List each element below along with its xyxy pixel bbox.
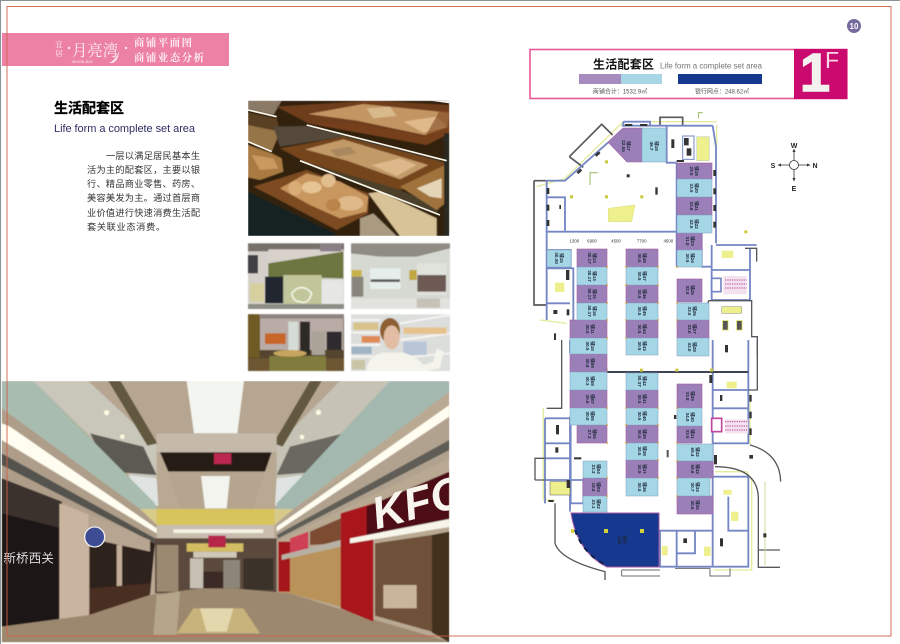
shop unit labels: 铺33	[694, 464, 701, 474]
blue shop units	[547, 128, 713, 512]
shop unit labels: 30.5	[637, 290, 642, 299]
dimension labels: 1300	[570, 239, 580, 244]
shop unit labels: 33.5	[689, 184, 694, 193]
shop unit labels: 30.5	[637, 483, 642, 492]
shop unit labels: 铺04	[595, 464, 602, 474]
page number: 10	[850, 22, 859, 31]
shop unit labels: 铺38	[641, 446, 648, 456]
shop unit labels: 铺44	[641, 324, 648, 334]
dimension labels: 6900	[587, 239, 597, 244]
left heading: 生活配套区	[54, 100, 124, 116]
shop unit labels: 铺36	[641, 482, 648, 492]
floor badge: F	[825, 47, 839, 73]
shop unit labels: 30.5	[637, 307, 642, 316]
shop unit labels: 30.0	[585, 412, 590, 421]
shop unit labels: 30.5	[685, 254, 690, 263]
dimension labels: 4500	[664, 239, 674, 244]
shop unit labels: 铺37	[641, 464, 648, 474]
shop unit labels: 铺11	[589, 324, 596, 334]
banner headings: 商铺业态分析	[134, 51, 204, 64]
body text: 行、精品商业零售、药房、	[87, 178, 200, 189]
shop unit labels: 28.5	[689, 167, 694, 176]
shop unit labels: 铺24	[689, 253, 696, 263]
shop unit labels: 68.4	[690, 448, 695, 457]
shop unit labels: 铺27	[691, 324, 698, 334]
shop unit labels: 33.0	[687, 325, 692, 334]
banner logo	[55, 39, 127, 64]
dimension labels: 4500	[611, 239, 621, 244]
shop unit labels: 248	[617, 536, 622, 544]
shop unit labels: 铺48	[641, 253, 648, 263]
shop unit labels: 30.17	[587, 305, 592, 317]
shop unit labels: 30.5	[637, 412, 642, 421]
legend bar: bank	[678, 74, 762, 84]
shop unit labels: 30.5	[690, 501, 695, 510]
shop unit labels	[554, 140, 701, 545]
shop unit labels: 30.5	[585, 342, 590, 351]
shop unit labels: 33.5	[687, 307, 692, 316]
shop unit labels: 铺45	[641, 306, 648, 316]
shop unit labels: 30.5	[637, 395, 642, 404]
floor plan	[534, 113, 781, 580]
shop unit labels: 铺17	[625, 141, 632, 151]
shop unit labels: 铺15	[591, 289, 598, 299]
legend captions	[593, 88, 749, 96]
shop unit labels: 铺25	[689, 285, 696, 295]
legend captions: 商铺合计：1532.9㎡	[593, 88, 647, 96]
bank unit	[571, 513, 659, 567]
shop unit labels: 22.55	[621, 140, 626, 152]
body text: 一层以满足居民基本生	[106, 150, 200, 161]
KFC lettering: KFC	[366, 465, 470, 539]
shop unit labels: 铺15	[558, 253, 565, 263]
shop unit labels: 铺41	[641, 394, 648, 404]
shop unit labels: 23.3	[591, 465, 596, 474]
shop unit labels: 银行	[621, 535, 628, 545]
shop unit labels: 铺14	[591, 271, 598, 281]
shop unit labels: 33.0	[689, 202, 694, 211]
shop unit labels: 34.0	[685, 413, 690, 422]
photo: dessert kiosk	[248, 243, 344, 309]
plan walls north	[534, 113, 757, 357]
purple shop units	[570, 128, 713, 514]
shop unit labels: 33.0	[687, 343, 692, 352]
shop unit labels: 30.8	[585, 359, 590, 368]
shop unit labels: 铺08	[589, 376, 596, 386]
floor badge	[794, 43, 847, 103]
shop unit labels: 铺06	[589, 411, 596, 421]
banner logo: MOON BAY	[72, 59, 94, 64]
shop unit labels: 30.5	[585, 325, 590, 334]
body text	[87, 150, 200, 232]
banner logo: 宜	[55, 39, 63, 49]
photo: mall corridor with KFC	[2, 381, 470, 642]
shop unit labels: 31.0	[685, 237, 690, 246]
legend title: 生活配套区	[593, 56, 654, 72]
shop unit labels: 铺43	[641, 341, 648, 351]
shop unit labels: 铺10	[589, 341, 596, 351]
shop unit labels: 30.3	[585, 377, 590, 386]
shop unit labels: 30.5	[637, 325, 642, 334]
shop unit labels: 30.5	[637, 447, 642, 456]
shop unit labels: 30.17	[587, 270, 592, 282]
shop unit labels: 58.8	[690, 465, 695, 474]
shop unit labels: 铺32	[694, 447, 701, 457]
shop unit labels: 27.3	[587, 430, 592, 439]
compass: N	[812, 163, 818, 170]
shop unit labels: 30.5	[637, 430, 642, 439]
legend subtitle: Life form a complete set area	[660, 62, 763, 70]
shop unit labels: 铺02	[595, 499, 602, 509]
shop unit labels: 30.7	[690, 483, 695, 492]
banner headings: 商铺平面图	[134, 36, 192, 49]
shop unit labels: 铺18	[653, 141, 660, 151]
compass: S	[771, 163, 776, 170]
shop unit labels: 18.6	[591, 483, 596, 492]
photo: pharmacist	[351, 314, 450, 371]
shop unit labels: 铺34	[694, 482, 701, 492]
storefront sign text: 新桥西关	[3, 550, 54, 565]
shop unit labels: 30.5	[637, 342, 642, 351]
banner	[2, 33, 229, 66]
body text: 活为主的配套区，主要以银	[87, 164, 200, 175]
shop unit labels: 32.5	[689, 220, 694, 229]
shop unit labels: 33.9	[685, 430, 690, 439]
left heading: Life form a complete set area	[54, 123, 196, 135]
shop unit labels: 铺05	[591, 429, 598, 439]
compass: W	[791, 143, 798, 150]
shop unit labels: 23.1	[591, 500, 596, 509]
shop unit labels: 46.7	[649, 142, 654, 151]
legend bar: shops	[579, 74, 662, 84]
banner logo: 月亮湾	[72, 42, 118, 60]
compass	[771, 143, 818, 193]
shop unit labels: 30.5	[637, 272, 642, 281]
shop unit labels: 铺09	[589, 358, 596, 368]
photo: fashion store	[248, 314, 344, 371]
banner logo: 居	[55, 49, 63, 58]
shop unit labels: 铺47	[641, 271, 648, 281]
legend panel	[530, 43, 847, 103]
legend captions: 银行网点：248.62㎡	[695, 88, 749, 96]
dimension labels	[570, 239, 674, 244]
shop unit labels: 铺03	[595, 482, 602, 492]
banner headings	[134, 36, 204, 64]
shop unit labels: 铺29	[689, 391, 696, 401]
shop unit labels: 30.37	[637, 375, 642, 387]
shop unit labels: 铺39	[641, 429, 648, 439]
shop unit labels: 30.17	[587, 252, 592, 264]
shop unit labels: 30.5	[637, 254, 642, 263]
shop unit labels: 铺20	[693, 183, 700, 193]
shop sign circle	[85, 527, 105, 547]
shop unit labels: 铺30	[689, 412, 696, 422]
left heading	[54, 100, 196, 135]
shop unit labels: 32.8	[685, 286, 690, 295]
shop unit labels: 铺19	[693, 166, 700, 176]
shop unit labels: 铺31	[689, 429, 696, 439]
shop unit labels: 30.6	[585, 395, 590, 404]
plan walls south	[535, 340, 781, 580]
shop unit labels: 铺13	[591, 253, 598, 263]
floor badge: 1	[800, 43, 830, 103]
shop unit labels: 铺16	[591, 306, 598, 316]
shop unit labels: 铺23	[689, 236, 696, 246]
page number	[847, 19, 861, 33]
photo: bakery baskets	[248, 101, 449, 236]
shop unit labels: 30.30	[554, 252, 559, 264]
shop unit labels: 30.17	[587, 288, 592, 300]
shop unit labels: 铺28	[691, 342, 698, 352]
shop unit labels: 铺26	[691, 306, 698, 316]
shop unit labels: 铺46	[641, 289, 648, 299]
body text: 业价值进行快速消费生活配	[87, 207, 200, 218]
body text: 套关联业态消费。	[87, 221, 165, 232]
shop unit labels: 30.5	[637, 465, 642, 474]
dimension labels: 7700	[637, 239, 647, 244]
photo collage	[248, 101, 450, 371]
shop unit labels: 铺42	[641, 376, 648, 386]
shop unit labels: 铺07	[589, 394, 596, 404]
column markers	[607, 267, 677, 496]
photo: shoe store	[351, 243, 450, 309]
shop unit labels: 铺40	[641, 411, 648, 421]
shop unit labels: 铺22	[693, 219, 700, 229]
shop unit labels: 铺21	[693, 201, 700, 211]
compass: E	[792, 186, 797, 193]
shop unit labels: 33.8	[685, 392, 690, 401]
shop unit labels: 铺35	[694, 500, 701, 510]
body text: 美容美发为主。通过首层商	[87, 192, 200, 203]
